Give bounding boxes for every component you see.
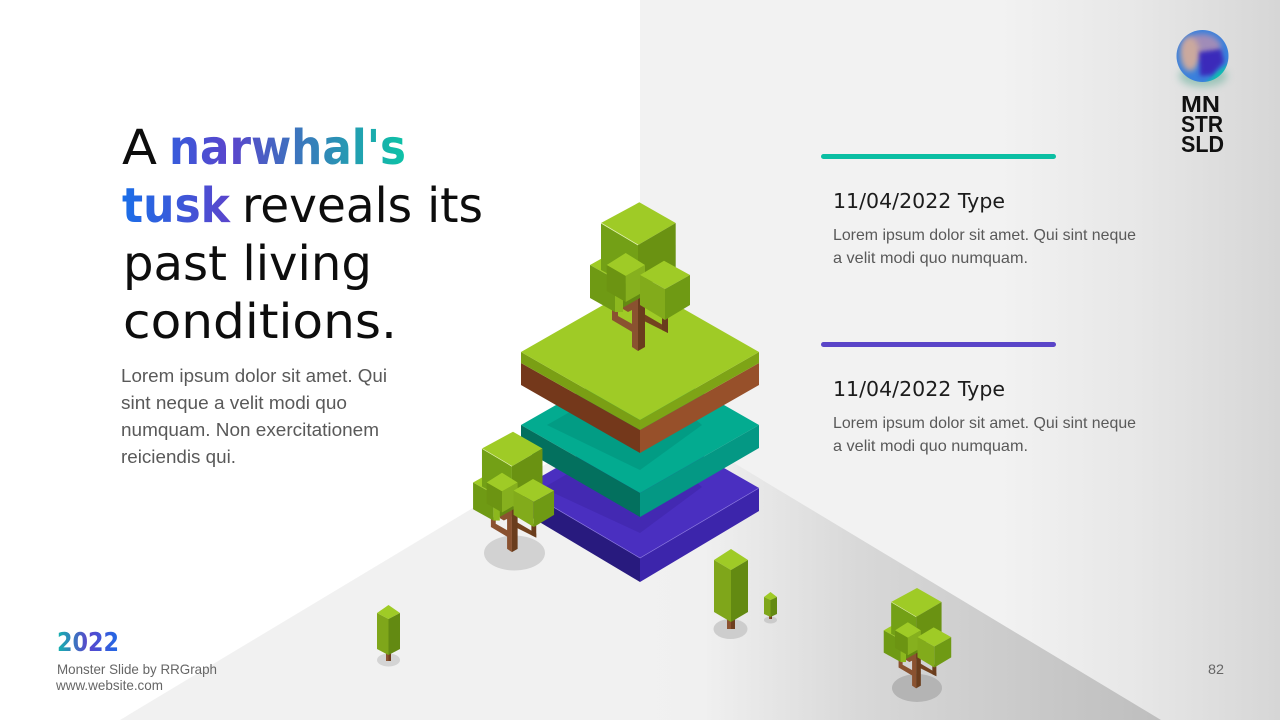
ground shadows [377, 536, 942, 702]
logo wordmark: MN [1181, 91, 1220, 117]
layer: purple [521, 420, 759, 582]
logo wordmark: STR [1181, 111, 1223, 137]
tree: bottom right [884, 588, 951, 688]
layered isometric diagram [521, 284, 759, 582]
isometric floor [120, 407, 1161, 720]
entry 2 [821, 342, 1136, 455]
logo icon: gradient sphere [1176, 30, 1232, 87]
title: tusk [122, 178, 231, 234]
title [122, 120, 483, 350]
title: conditions. [123, 294, 397, 350]
intro text block: reiciendis qui. [121, 446, 236, 467]
footer credits [55, 661, 217, 693]
logo wordmark [1181, 91, 1224, 157]
layer: teal [521, 357, 759, 517]
title: A [122, 120, 157, 176]
tree: left column [377, 605, 400, 661]
footer credits: www.website.com [55, 677, 163, 693]
logo wordmark: SLD [1181, 131, 1224, 157]
intro text block [121, 365, 387, 467]
title: reveals its [242, 178, 483, 234]
entry 1: 11/04/2022 Type [833, 189, 1005, 213]
entry 1 [821, 154, 1136, 267]
intro text block: sint neque a velit modi quo [121, 392, 347, 413]
tree: tall column [714, 549, 748, 629]
entry 2: 11/04/2022 Type [833, 377, 1005, 401]
intro text block: Lorem ipsum dolor sit amet. Qui [121, 365, 387, 386]
entry 2: Lorem ipsum dolor sit amet. Qui sint neque [833, 415, 1136, 432]
title: narwhal's [169, 120, 406, 176]
tree: small column [764, 592, 777, 619]
tree: on top plate [590, 202, 690, 351]
page number: 82 [1208, 661, 1224, 677]
tree: left of layers [473, 432, 554, 552]
footer year: 2022 [57, 628, 119, 658]
layer: soil and grass [521, 284, 759, 453]
entry 1: Lorem ipsum dolor sit amet. Qui sint neque [833, 227, 1136, 244]
footer credits: Monster Slide by RRGraph [57, 661, 217, 677]
entry 1: a velit modi quo numquam. [833, 250, 1028, 267]
intro text block: numquam. Non exercitationem [121, 419, 379, 440]
entry 2: a velit modi quo numquam. [833, 438, 1028, 455]
title: past living [123, 236, 372, 292]
